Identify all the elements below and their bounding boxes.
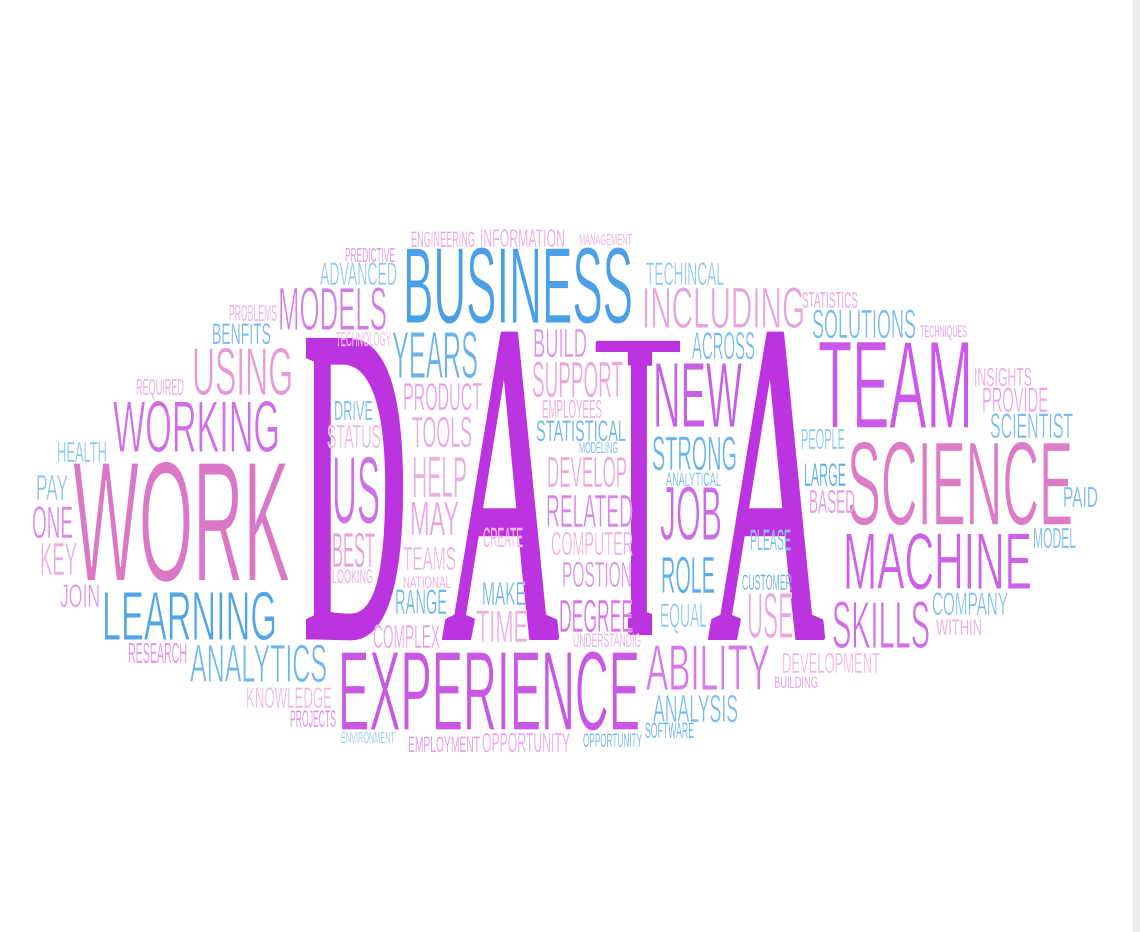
- medium words: COMPLEX: [373, 618, 440, 655]
- small words: REQUIRED: [136, 374, 184, 400]
- medium words: POSTION: [562, 554, 632, 595]
- small words: OPPORTUNITY: [583, 731, 642, 752]
- large words: NEW: [653, 343, 742, 447]
- medium words: KEY: [40, 533, 77, 585]
- small words: MANAGEMENT: [579, 232, 632, 249]
- medium words: EQUAL: [660, 597, 707, 635]
- small words: PAID: [1063, 482, 1098, 514]
- medium words: TECHINCAL: [646, 256, 724, 292]
- medium words: STATUS: [327, 418, 381, 455]
- small words: PREDICTIVE: [345, 245, 395, 267]
- small words: RESEARCH: [128, 638, 187, 670]
- small words: INFORMATION: [480, 225, 565, 253]
- small words: WITHIN: [936, 615, 982, 640]
- medium words: ANALYSIS: [653, 688, 738, 731]
- medium words: PROVIDE: [982, 381, 1048, 420]
- small words: BASED: [809, 483, 855, 520]
- medium words: BUILD: [533, 320, 587, 366]
- small words: HEALTH: [57, 437, 107, 469]
- headline word: DATA: T: [594, 241, 684, 728]
- large words: SKILLS: [832, 588, 930, 663]
- medium words: ACROSS: [692, 325, 755, 368]
- large words: [73, 225, 1073, 754]
- small words: ANALYTICAL: [666, 470, 721, 491]
- medium words: KNOWLEDGE: [246, 682, 332, 715]
- large words: WORKING: [113, 387, 280, 468]
- large words: INCLUDING: [642, 276, 805, 341]
- medium words: TOOLS: [412, 408, 472, 457]
- small words: DRIVE: [334, 395, 373, 426]
- medium words: RANGE: [395, 583, 447, 622]
- headline word: DATA: A: [438, 231, 573, 735]
- small words: [57, 225, 1098, 758]
- large words: USE: [747, 579, 793, 652]
- medium words: ROLE: [661, 547, 715, 605]
- medium words: JOIN: [60, 578, 100, 614]
- small words: OPPORTUNITY: [482, 727, 570, 758]
- small words: TECHNIQUES: [920, 322, 967, 341]
- small words: EMPLOYEES: [542, 394, 602, 424]
- medium words: ONE: [32, 497, 73, 548]
- small words: INSIGHTS: [974, 362, 1032, 392]
- small words: PROBLEMS: [229, 300, 277, 326]
- medium words: ADVANCED: [320, 256, 397, 292]
- medium words: PAY: [36, 467, 68, 508]
- medium words: SUPPORT: [532, 351, 623, 408]
- medium words: STRONG: [652, 428, 737, 481]
- large words: YEARS: [392, 318, 478, 393]
- headline word: DATA: D: [298, 236, 408, 734]
- medium words: [32, 256, 1073, 731]
- small words: ENGINEERING: [411, 227, 475, 252]
- large words: US: [332, 437, 380, 544]
- small words: CUSTOMER: [742, 570, 792, 595]
- small words: BENFITS: [212, 318, 271, 351]
- large words: EXPERIENCE: [338, 628, 640, 754]
- small words: LARGE: [804, 457, 846, 493]
- small words: BUILDING: [774, 673, 818, 692]
- medium words: MAY: [410, 493, 459, 546]
- small words: TECHNOLOGY: [336, 329, 391, 351]
- small words: CREATE: [483, 522, 523, 553]
- large words: ANALYTICS: [190, 634, 327, 694]
- large words: JOB: [660, 471, 722, 557]
- large words: ABILITY: [646, 631, 770, 704]
- large words: USING: [192, 334, 293, 410]
- medium words: BEST: [332, 524, 375, 578]
- medium words: PRODUCT: [403, 376, 482, 419]
- medium words: COMPANY: [932, 586, 1008, 622]
- small words: PLEASE: [750, 525, 791, 557]
- medium words: TIME: [476, 601, 528, 652]
- small words: STATISTICAL: [536, 415, 626, 448]
- small words: EMPLOYMENT: [408, 732, 480, 757]
- small words: LOOKING: [332, 567, 373, 588]
- small words: SOFTWARE: [645, 718, 694, 743]
- small words: ENVIRONMENT: [341, 730, 395, 747]
- large words: WORK: [73, 426, 290, 618]
- medium words: COMPUTER: [551, 525, 633, 562]
- medium words: DEVELOP: [547, 448, 627, 497]
- medium words: DEGREE: [559, 590, 633, 642]
- small words: MODELING: [579, 440, 618, 457]
- large words: LEARNING: [102, 577, 277, 655]
- medium words: SOLUTIONS: [812, 301, 916, 347]
- medium words: HELP: [412, 445, 467, 510]
- small words: UNDERSTANDIG: [573, 631, 641, 652]
- small words: STATISTICS: [802, 287, 858, 313]
- medium words: MAKE: [482, 575, 526, 612]
- large words: MODELS: [278, 275, 387, 343]
- medium words: TEAMS: [403, 540, 456, 577]
- headline word: DATA: [306, 332, 826, 640]
- large words: BUSINESS: [403, 225, 633, 347]
- small words: PROJECTS: [290, 706, 336, 733]
- small words: NATIONAL: [403, 573, 451, 592]
- small words: PEOPLE: [801, 424, 845, 456]
- medium words: DEVELOPMENT: [782, 648, 880, 680]
- medium words: RELATED: [546, 485, 633, 537]
- small words: MODEL: [1033, 523, 1076, 555]
- word cloud infographic: A: [704, 231, 839, 735]
